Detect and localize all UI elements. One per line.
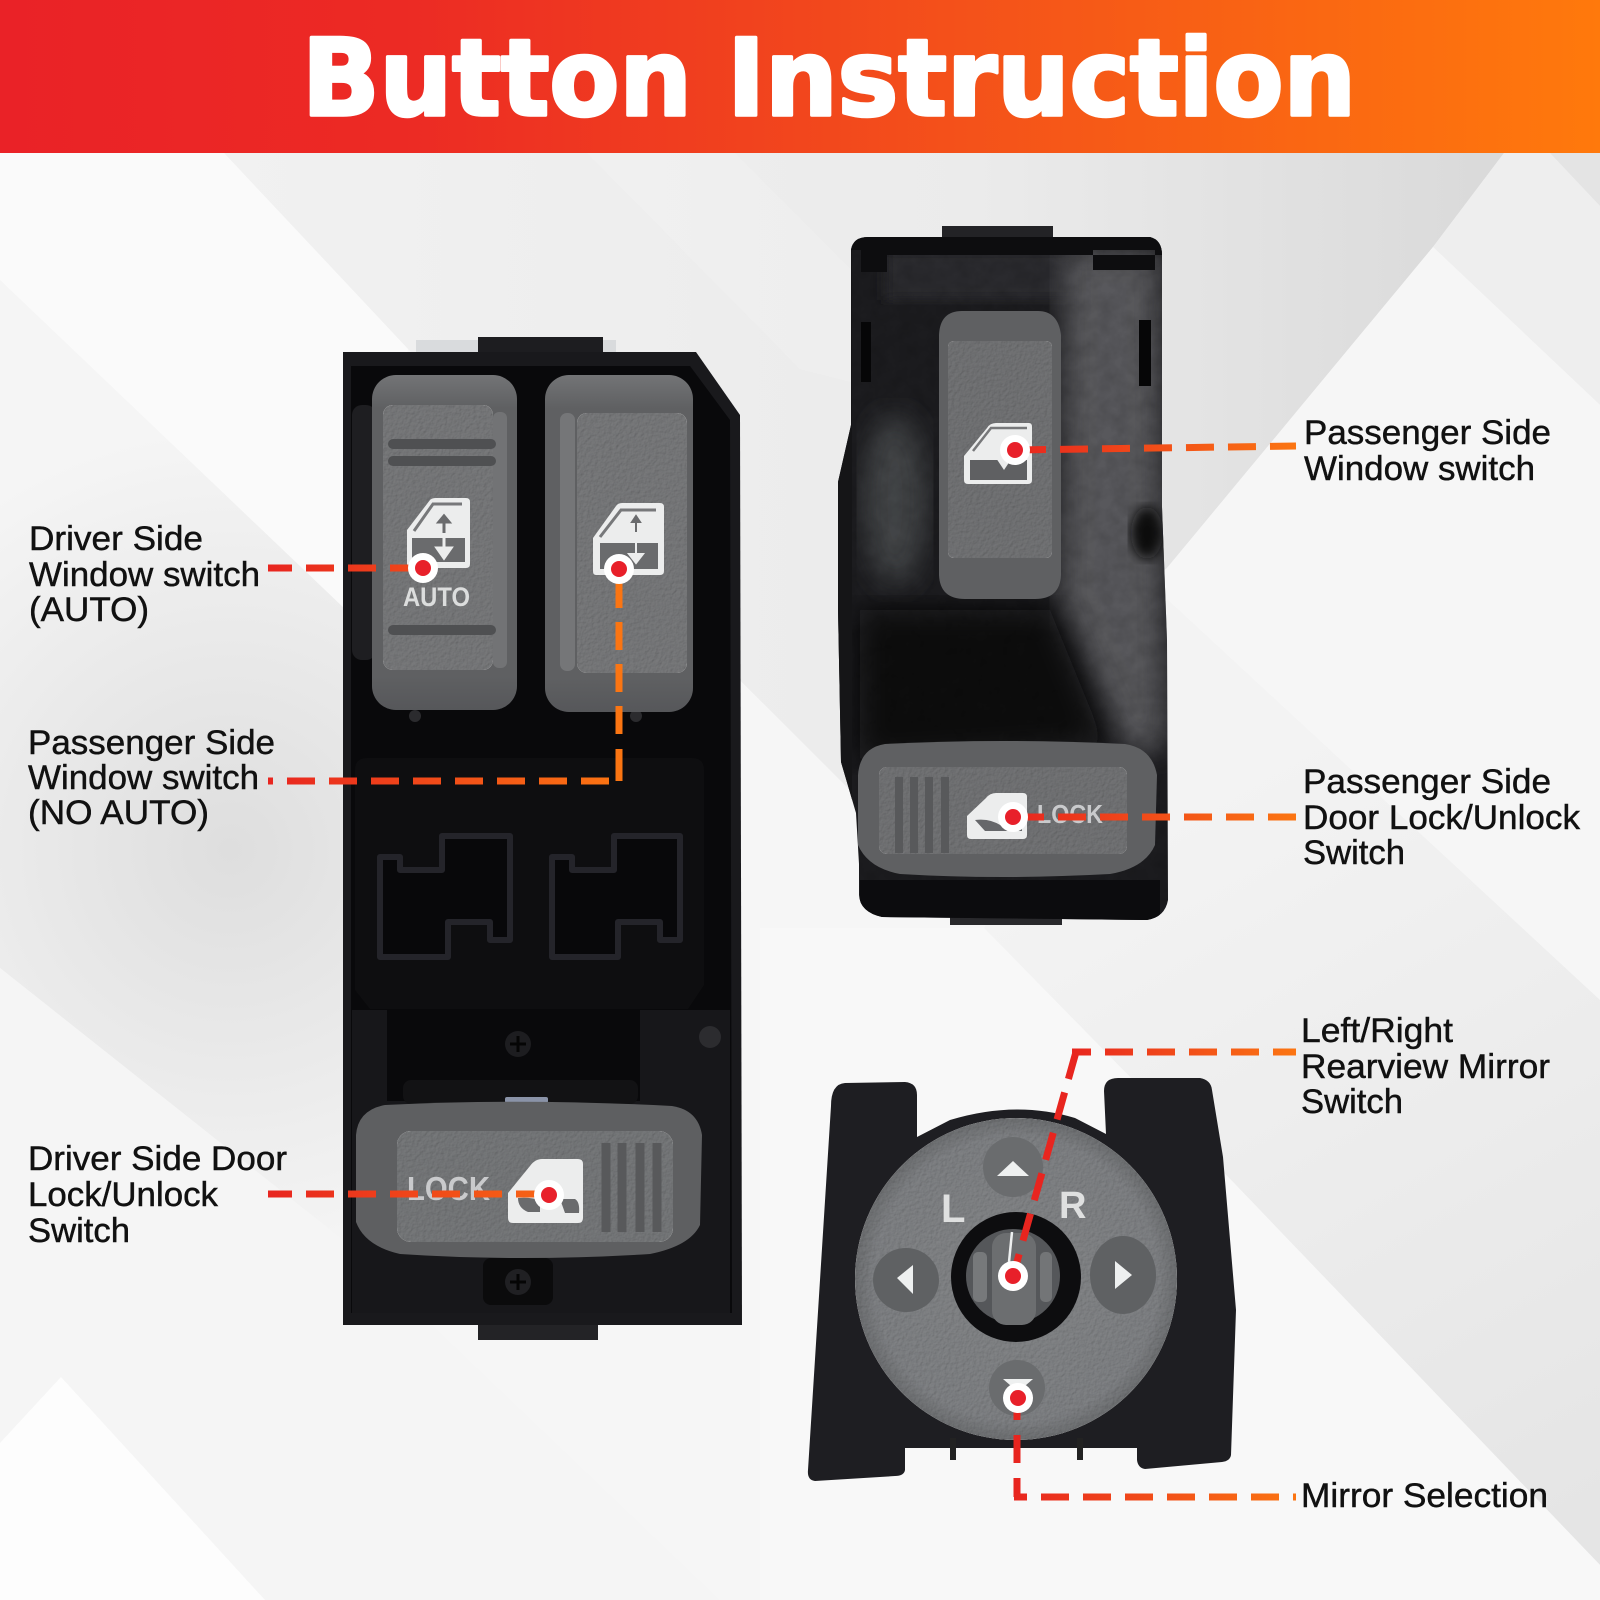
driver door lock button: LOCK bbox=[407, 1170, 490, 1207]
passenger window button (NO AUTO) bbox=[545, 375, 693, 712]
driver door lock button bbox=[356, 1097, 702, 1258]
right button bbox=[1090, 1236, 1156, 1314]
label: driver side door lock: Switch bbox=[28, 1212, 130, 1250]
driver window button (AUTO): AUTO bbox=[403, 582, 470, 612]
leader: passenger window switch no auto bbox=[268, 554, 634, 781]
selector knob bbox=[951, 1212, 1081, 1342]
label: passenger side window switch no auto: Window switch bbox=[28, 759, 259, 797]
leader: passenger window switch bbox=[1000, 435, 1296, 465]
passenger switch unit bbox=[838, 226, 1168, 925]
leader: driver door lock bbox=[268, 1180, 564, 1210]
down button bbox=[989, 1360, 1045, 1416]
label: passenger side door lock bbox=[1303, 763, 1581, 872]
passenger door lock button: LOCK bbox=[1037, 799, 1103, 829]
label: driver side door lock: Lock/Unlock bbox=[28, 1176, 219, 1214]
label: driver side window switch auto: (AUTO) bbox=[29, 591, 149, 629]
label: rearview mirror switch: Switch bbox=[1301, 1083, 1403, 1121]
label: rearview mirror switch bbox=[1301, 1012, 1550, 1121]
label: driver side door lock bbox=[28, 1140, 287, 1250]
leader: mirror selection bbox=[1003, 1383, 1296, 1497]
label: passenger side window switch: Window switch bbox=[1304, 450, 1535, 488]
header banner bbox=[0, 0, 1600, 153]
label: driver side door lock: Driver Side Door bbox=[28, 1140, 287, 1178]
mirror switch unit bbox=[808, 1078, 1236, 1481]
label: passenger side window switch: Passenger Side bbox=[1304, 414, 1551, 452]
label: rearview mirror switch: Left/Right bbox=[1301, 1012, 1454, 1050]
label: passenger side window switch bbox=[1304, 414, 1551, 488]
driver switch unit bbox=[343, 337, 742, 1340]
left button bbox=[873, 1248, 939, 1312]
leader: driver window switch bbox=[268, 553, 438, 583]
up button bbox=[983, 1137, 1043, 1197]
label: driver side window switch auto bbox=[29, 520, 260, 629]
leader: passenger door lock bbox=[998, 802, 1296, 832]
label: passenger side window switch no auto: (NO AUTO) bbox=[28, 794, 209, 832]
driver window button (AUTO) bbox=[372, 375, 517, 710]
letter L: L bbox=[941, 1187, 965, 1231]
letter R: R bbox=[1059, 1185, 1086, 1227]
passenger window button bbox=[939, 311, 1061, 599]
control disc bbox=[855, 1118, 1177, 1440]
passenger door lock button bbox=[858, 741, 1157, 877]
label: driver side window switch auto: Window switch bbox=[29, 556, 260, 594]
title: Button Instruction bbox=[302, 17, 1356, 140]
label: driver side window switch auto: Driver Side bbox=[29, 520, 203, 558]
label: passenger side door lock: Door Lock/Unlock bbox=[1303, 799, 1581, 837]
label: passenger side window switch no auto: Passenger Side bbox=[28, 724, 275, 762]
label: passenger side window switch no auto bbox=[28, 724, 275, 832]
blank panel bbox=[355, 758, 704, 1009]
label: passenger side door lock: Passenger Side bbox=[1303, 763, 1551, 801]
label: mirror selection: Mirror Selection bbox=[1301, 1477, 1548, 1515]
leader: rearview mirror switch bbox=[998, 1052, 1296, 1291]
label: passenger side door lock: Switch bbox=[1303, 834, 1405, 872]
label: rearview mirror switch: Rearview Mirror bbox=[1301, 1048, 1550, 1086]
